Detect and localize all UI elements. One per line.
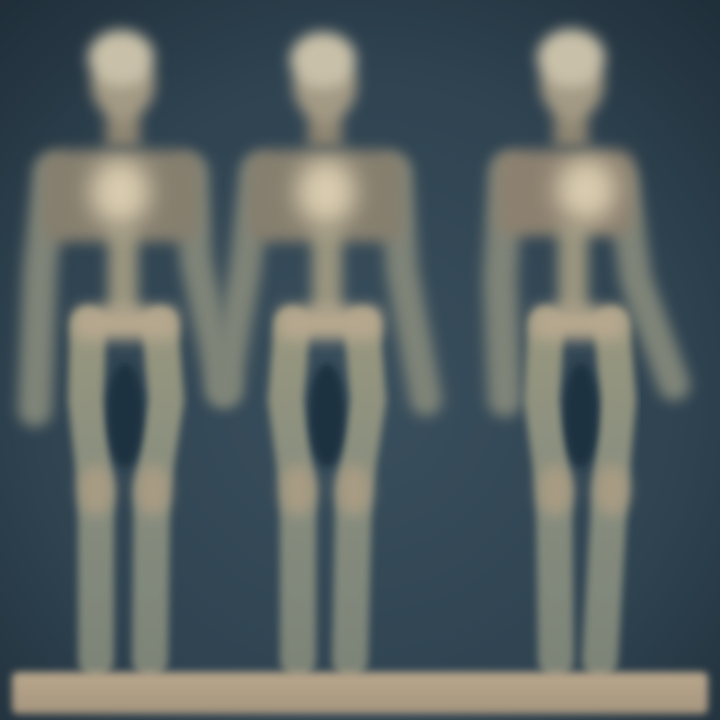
figure 2 leg gap bbox=[309, 363, 345, 467]
figure 2 chest highlight bbox=[296, 158, 356, 226]
figure 1 head bbox=[88, 30, 155, 147]
figure 1 chest highlight bbox=[90, 158, 150, 226]
figure 3 bbox=[496, 29, 674, 660]
figure 1 legs bbox=[86, 325, 166, 660]
figure 3 head bbox=[537, 29, 605, 147]
figure 2 arms bbox=[224, 172, 426, 400]
figure 1 arms bbox=[35, 172, 224, 410]
wooden base plank bbox=[12, 672, 708, 714]
figure 3 legs bbox=[542, 325, 618, 660]
figure 3 leg gap bbox=[564, 363, 598, 467]
figure 1 torso bbox=[42, 150, 200, 318]
figure 1 leg gap bbox=[107, 363, 143, 467]
figure 1 knees bbox=[79, 464, 170, 516]
figure 3 torso bbox=[496, 150, 634, 315]
figure 2 knees bbox=[281, 464, 371, 516]
figure 2 bbox=[224, 32, 426, 660]
figure 2 head bbox=[290, 32, 357, 147]
figure 3 knees bbox=[538, 464, 629, 516]
figure 2 torso bbox=[248, 150, 404, 318]
figure 3 arms bbox=[500, 172, 674, 400]
figure 3 pelvis bbox=[532, 306, 626, 340]
figure 1 pelvis bbox=[74, 306, 178, 340]
figure 3 chest highlight bbox=[556, 158, 616, 222]
figure 1 bbox=[35, 30, 224, 660]
figure 2 legs bbox=[286, 325, 368, 660]
figure 2 pelvis bbox=[278, 306, 382, 340]
